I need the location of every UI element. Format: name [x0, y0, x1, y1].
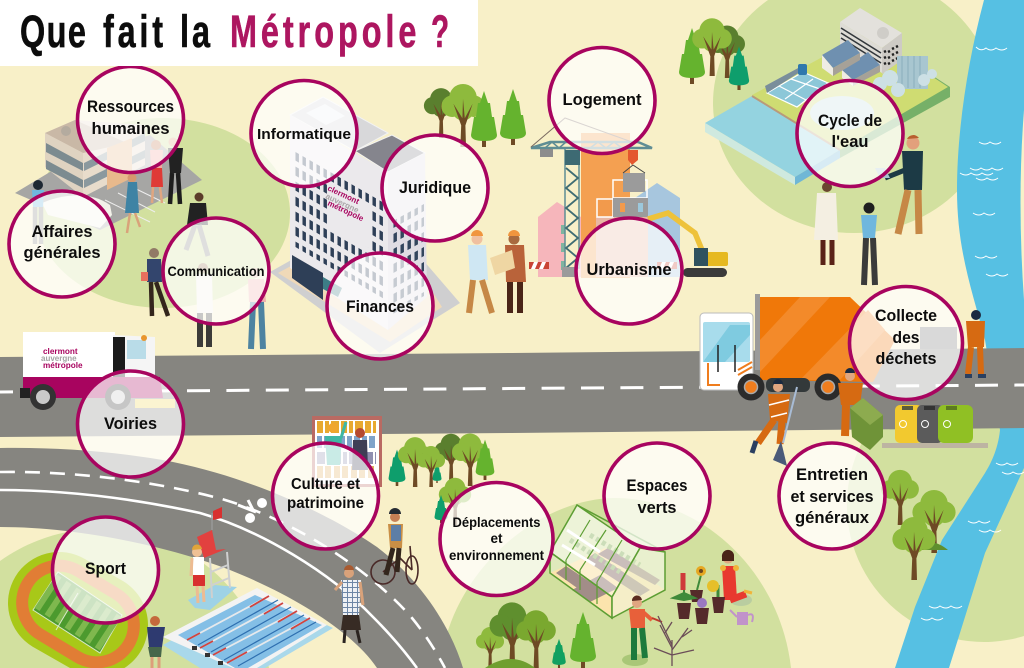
office building and parking — [15, 120, 202, 230]
library shelf — [312, 416, 382, 487]
excavator — [648, 213, 728, 277]
bubble: Entretien et services généraux: Entretien — [796, 465, 868, 484]
bubble: Affaires générales: Affaires — [32, 222, 92, 241]
person: woman in red skirt — [150, 140, 163, 203]
bubble: Culture et patrimoine: Culture et — [291, 476, 361, 493]
person: athlete — [147, 616, 165, 668]
sweeper truck: clermont — [43, 347, 78, 356]
trees: riverside — [881, 470, 956, 580]
bubble: Entretien et services généraux: et services — [790, 487, 874, 506]
bubble: Juridique — [382, 135, 488, 241]
garbage truck — [700, 294, 957, 400]
bubble: Collecte des déchets: Collecte — [875, 306, 937, 325]
bubble: Voiries: Voiries — [104, 414, 157, 433]
person: man in white shirt — [196, 263, 213, 347]
stadium — [0, 544, 156, 668]
bubble: Urbanisme — [576, 218, 682, 324]
title: la — [180, 8, 213, 57]
title: Que — [20, 8, 87, 57]
bubble: Logement: Logement — [562, 90, 642, 109]
bubble: Informatique: Informatique — [257, 127, 351, 143]
bubble: Collecte des déchets — [850, 286, 962, 400]
bubble: Culture et patrimoine — [272, 443, 378, 549]
green area: water plant — [713, 0, 995, 233]
sweeper truck: auvergne — [41, 354, 77, 363]
bubble: Entretien et services généraux: généraux — [795, 508, 870, 527]
curved road — [0, 448, 463, 668]
green area: sport — [0, 529, 269, 668]
trees: bottom centre — [476, 602, 596, 668]
lifeguard chair — [188, 507, 237, 610]
sanitation workers — [752, 310, 986, 466]
headquarters tower — [270, 97, 460, 353]
person: woman with bag — [141, 248, 168, 316]
green area: gardens — [440, 498, 791, 668]
bubble: Collecte des déchets: des — [892, 328, 920, 347]
bubble: Ressources humaines: Ressources — [87, 97, 174, 116]
bubble: Collecte des déchets: déchets — [876, 349, 936, 368]
swimming pool — [163, 588, 333, 668]
bubble: Ressources humaines — [78, 66, 184, 172]
bubble: Communication: Communication — [168, 263, 264, 279]
bubble: Logement — [549, 48, 655, 154]
bubble: Juridique: Juridique — [399, 178, 471, 197]
trees: top right — [679, 18, 749, 90]
woman gardening and flower pots — [673, 550, 753, 625]
person: walking businessman — [186, 192, 208, 256]
river — [895, 0, 1024, 668]
main road — [0, 348, 1024, 437]
title: ? — [431, 7, 449, 58]
sweeper truck — [20, 332, 175, 410]
bubble: Urbanisme: Urbanisme — [586, 260, 672, 279]
sweeper truck: métropole — [43, 361, 83, 370]
bubble: Finances — [327, 253, 433, 359]
green wheelie bin — [850, 398, 883, 450]
construction workers — [468, 230, 526, 313]
bubble: Voiries — [78, 371, 184, 477]
trees: centre — [389, 434, 494, 525]
bubble: Sport: Sport — [85, 559, 126, 578]
green area: riverside — [847, 368, 1024, 642]
water staff — [814, 135, 923, 285]
green area: offices — [36, 118, 290, 308]
title: fait — [103, 8, 167, 57]
bubble: Culture et patrimoine: patrimoine — [287, 495, 364, 512]
bubble: Espaces verts — [604, 443, 710, 549]
bubble: Entretien et services généraux — [779, 443, 885, 549]
bubble: Sport — [52, 517, 158, 623]
bubble: Déplacements et environnement — [440, 482, 553, 596]
bubble: Cycle de l'eau — [797, 80, 903, 186]
headquarters tower: auvergne — [324, 192, 361, 215]
person: woman in blue dress — [125, 174, 140, 233]
person: lifeguard — [191, 544, 205, 603]
bubble: Déplacements et environnement: Déplacements — [452, 514, 541, 530]
headquarters tower: clermont — [326, 184, 361, 206]
person: pedestrian in check shirt — [335, 565, 363, 643]
water treatment plant — [705, 8, 950, 185]
bubble: Déplacements et environnement: et — [490, 530, 503, 546]
bubble: Finances: Finances — [346, 297, 414, 316]
person: cyclist — [371, 508, 418, 584]
title: Métropole — [230, 8, 420, 57]
bubble: Déplacements et environnement: environnement — [449, 547, 544, 563]
bubble: Espaces verts: verts — [638, 498, 676, 517]
construction site — [529, 118, 680, 278]
bubble: Espaces verts: Espaces — [626, 476, 688, 495]
headquarters tower: métropole — [326, 199, 366, 223]
person: man in black suit — [168, 138, 183, 204]
bubble: Cycle de l'eau: l'eau — [832, 132, 868, 151]
greenhouse — [550, 505, 665, 618]
person: woman in blue top — [32, 180, 44, 244]
gardener with shears — [622, 595, 694, 666]
bubble: Affaires générales: générales — [24, 243, 100, 262]
bubble: Ressources humaines: humaines — [92, 119, 170, 138]
bubble: Informatique — [251, 80, 357, 186]
trees: top centre — [424, 84, 526, 147]
person: woman in pink — [248, 268, 266, 349]
bubble: Communication — [163, 218, 269, 324]
title — [0, 0, 478, 66]
bubble: Affaires générales — [9, 191, 115, 297]
recycling bins — [882, 405, 988, 448]
bubble: Cycle de l'eau: Cycle de — [818, 111, 882, 130]
